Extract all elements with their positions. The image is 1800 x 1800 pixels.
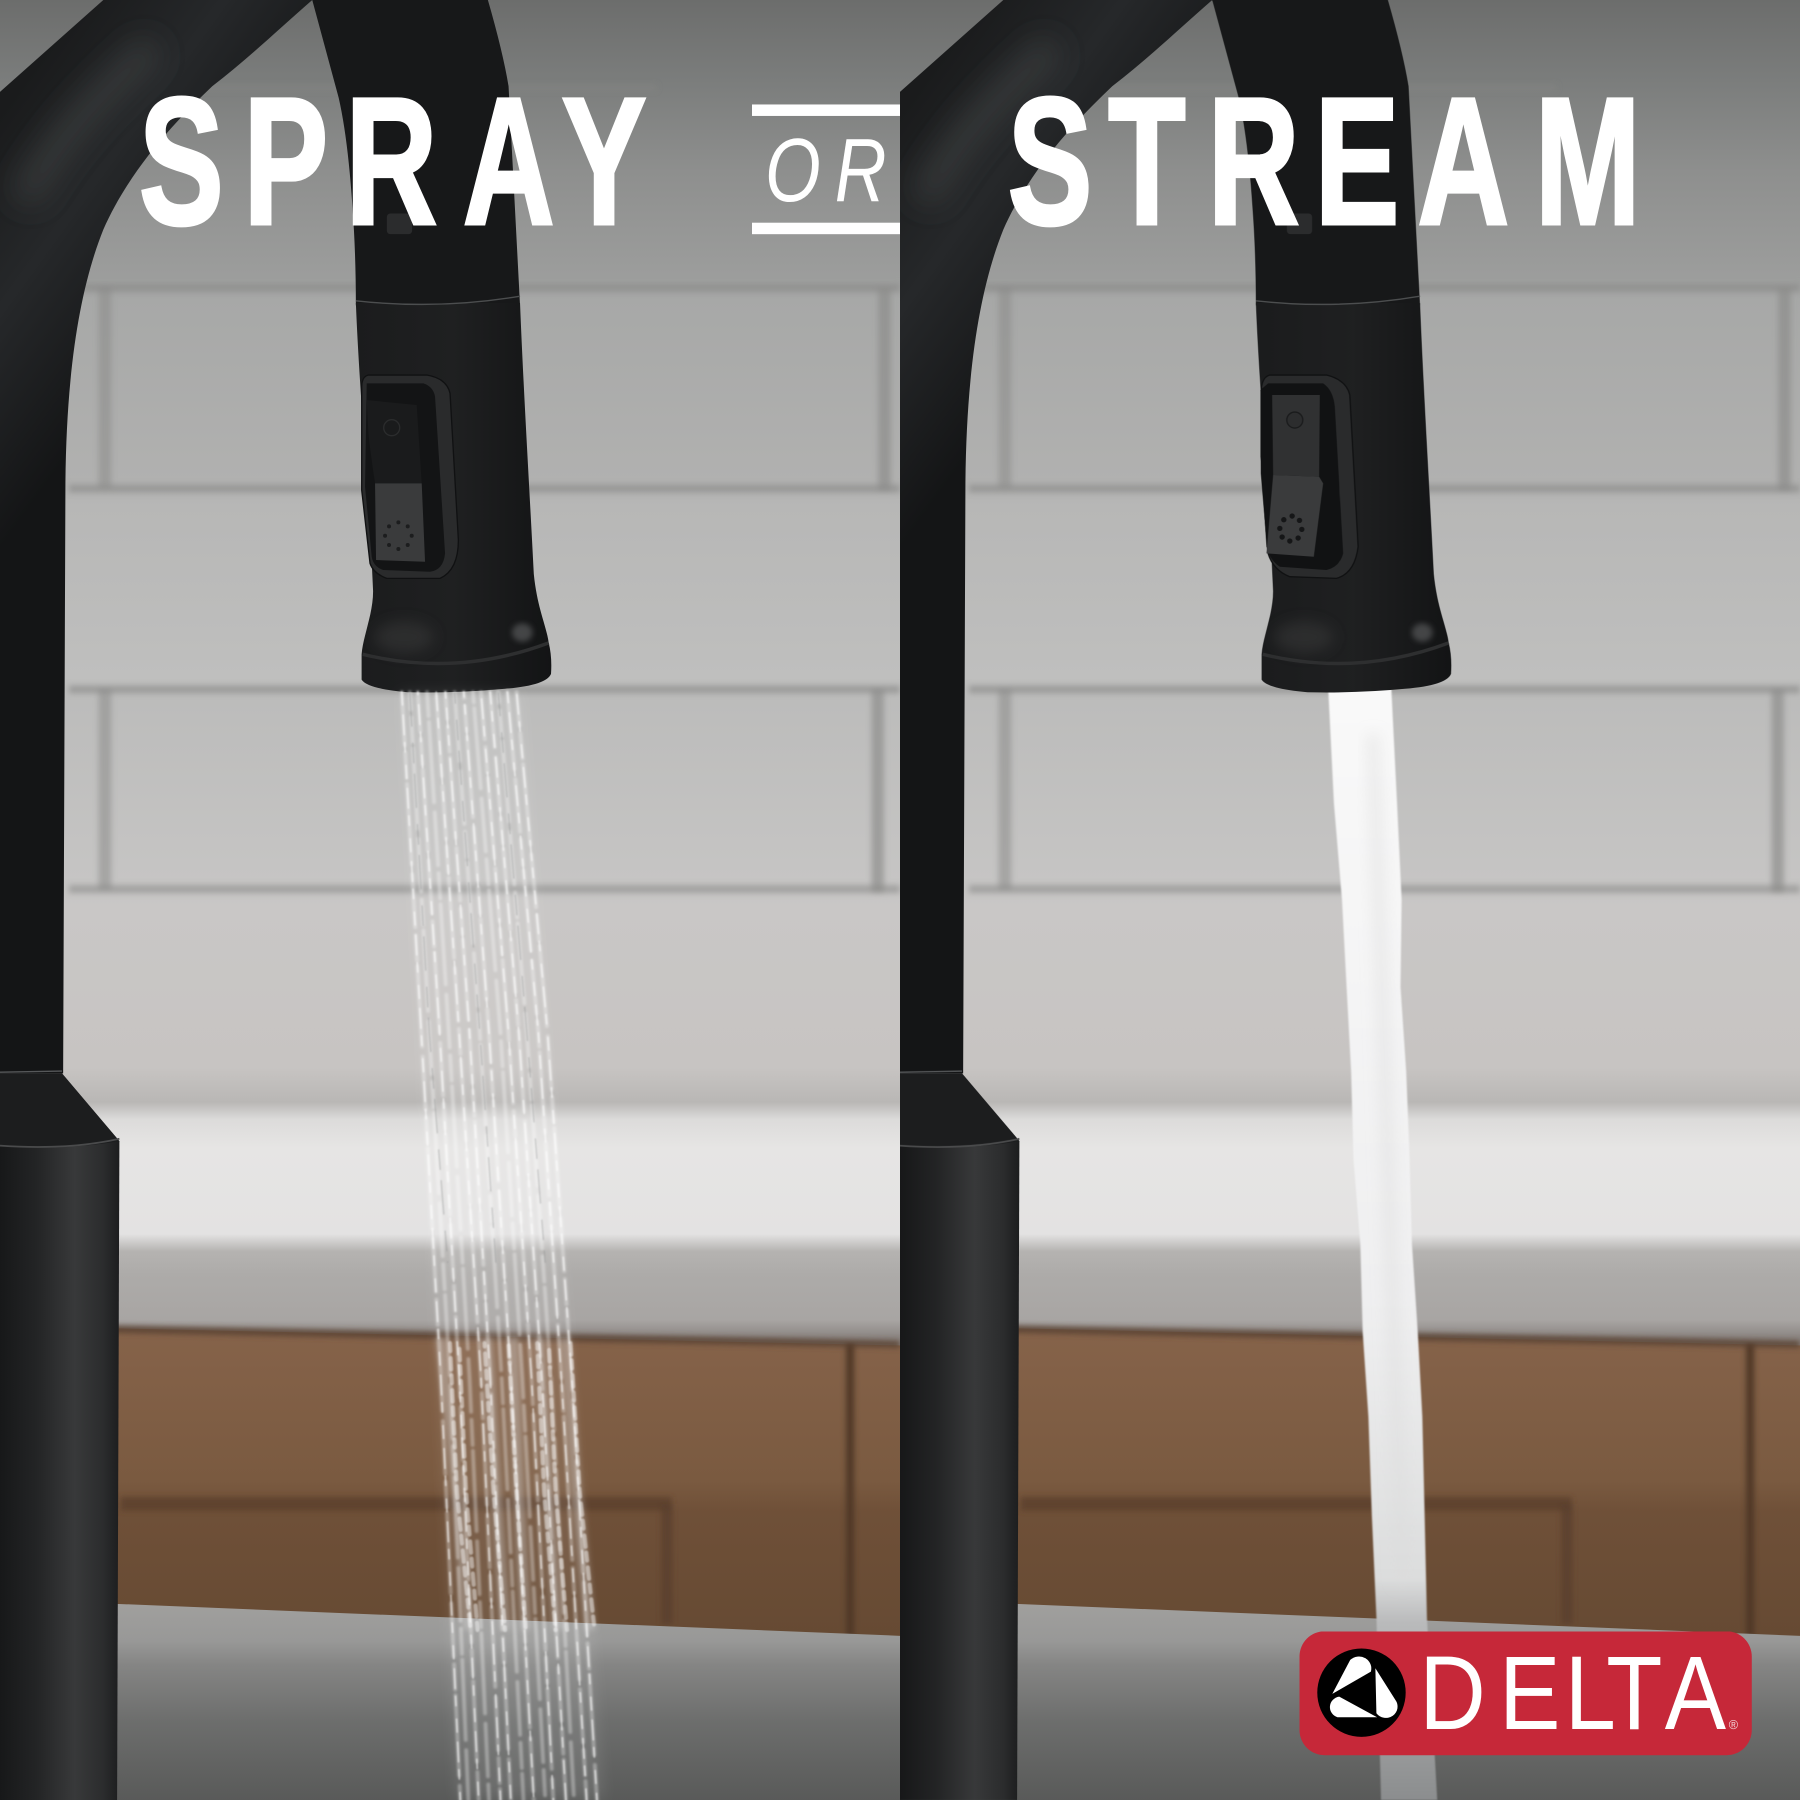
faucet: spray head [356, 296, 551, 692]
faucet: rocker button (stream selected) [1260, 375, 1358, 578]
faucet: arched spout [0, 0, 312, 1073]
wordmark: DELTA [1419, 1634, 1726, 1751]
registered mark: ® [1729, 1718, 1739, 1732]
faucet: rocker button (spray selected) [362, 375, 458, 578]
faucet: spray head [1256, 296, 1451, 692]
faucet: base [0, 1071, 119, 1800]
faucet: slider detail [387, 214, 412, 234]
divider: OR [752, 104, 900, 234]
faucet: base [900, 1071, 1019, 1800]
panel: stream photo [900, 0, 1800, 1800]
background: sink basin [1017, 1604, 1800, 1800]
heading: STREAM: STREAM [1008, 60, 1641, 263]
divider: OR: OR [765, 121, 887, 221]
background: tiled wall and counter [0, 0, 900, 1378]
faucet: neck [312, 0, 520, 305]
background: wood cabinet [1018, 1322, 1800, 1636]
background: tiled wall and counter [900, 0, 1800, 1378]
faucet: arched spout [900, 0, 1212, 1073]
water: solid stream [1328, 689, 1437, 1800]
faucet: neck [1212, 0, 1420, 305]
logo: Delta [1299, 1631, 1752, 1755]
panel: spray photo [0, 0, 900, 1800]
faucet: slider detail [1287, 214, 1312, 234]
background: wood cabinet [118, 1322, 900, 1636]
background: sink basin [0, 1599, 900, 1800]
icon: Delta triangle mark [1317, 1648, 1406, 1737]
heading: SPRAY: SPRAY [139, 60, 646, 263]
water: spray streaks [399, 692, 604, 1800]
